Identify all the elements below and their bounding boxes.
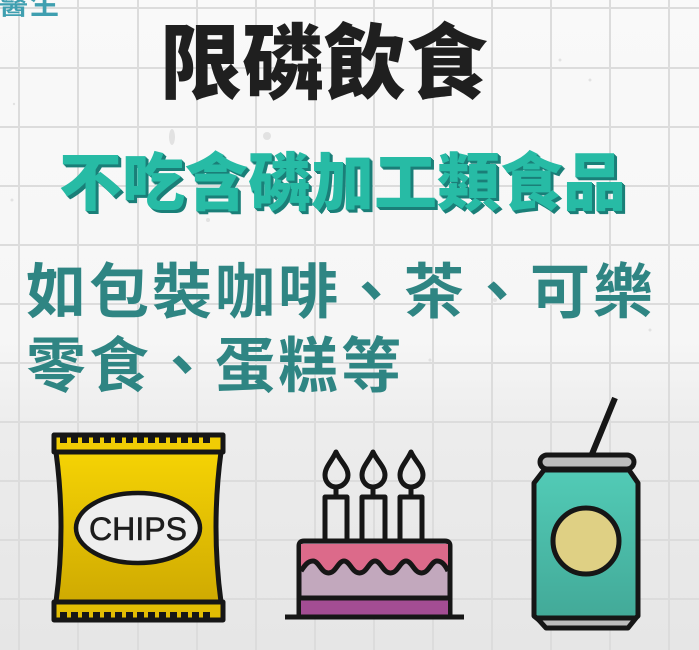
subtitle: 不吃含磷加工類食品 [59,149,626,219]
body text: 零食、蛋糕等 [26,333,404,400]
icon: chips bag [54,435,223,620]
icon: chips bag: CHIPS [89,511,187,547]
body text: 如包裝咖啡、茶、可樂 [26,259,656,326]
title: 限磷飲食 [160,19,488,110]
icon: soda can [534,398,638,628]
body text [26,259,656,400]
icon: birthday cake [285,452,464,617]
